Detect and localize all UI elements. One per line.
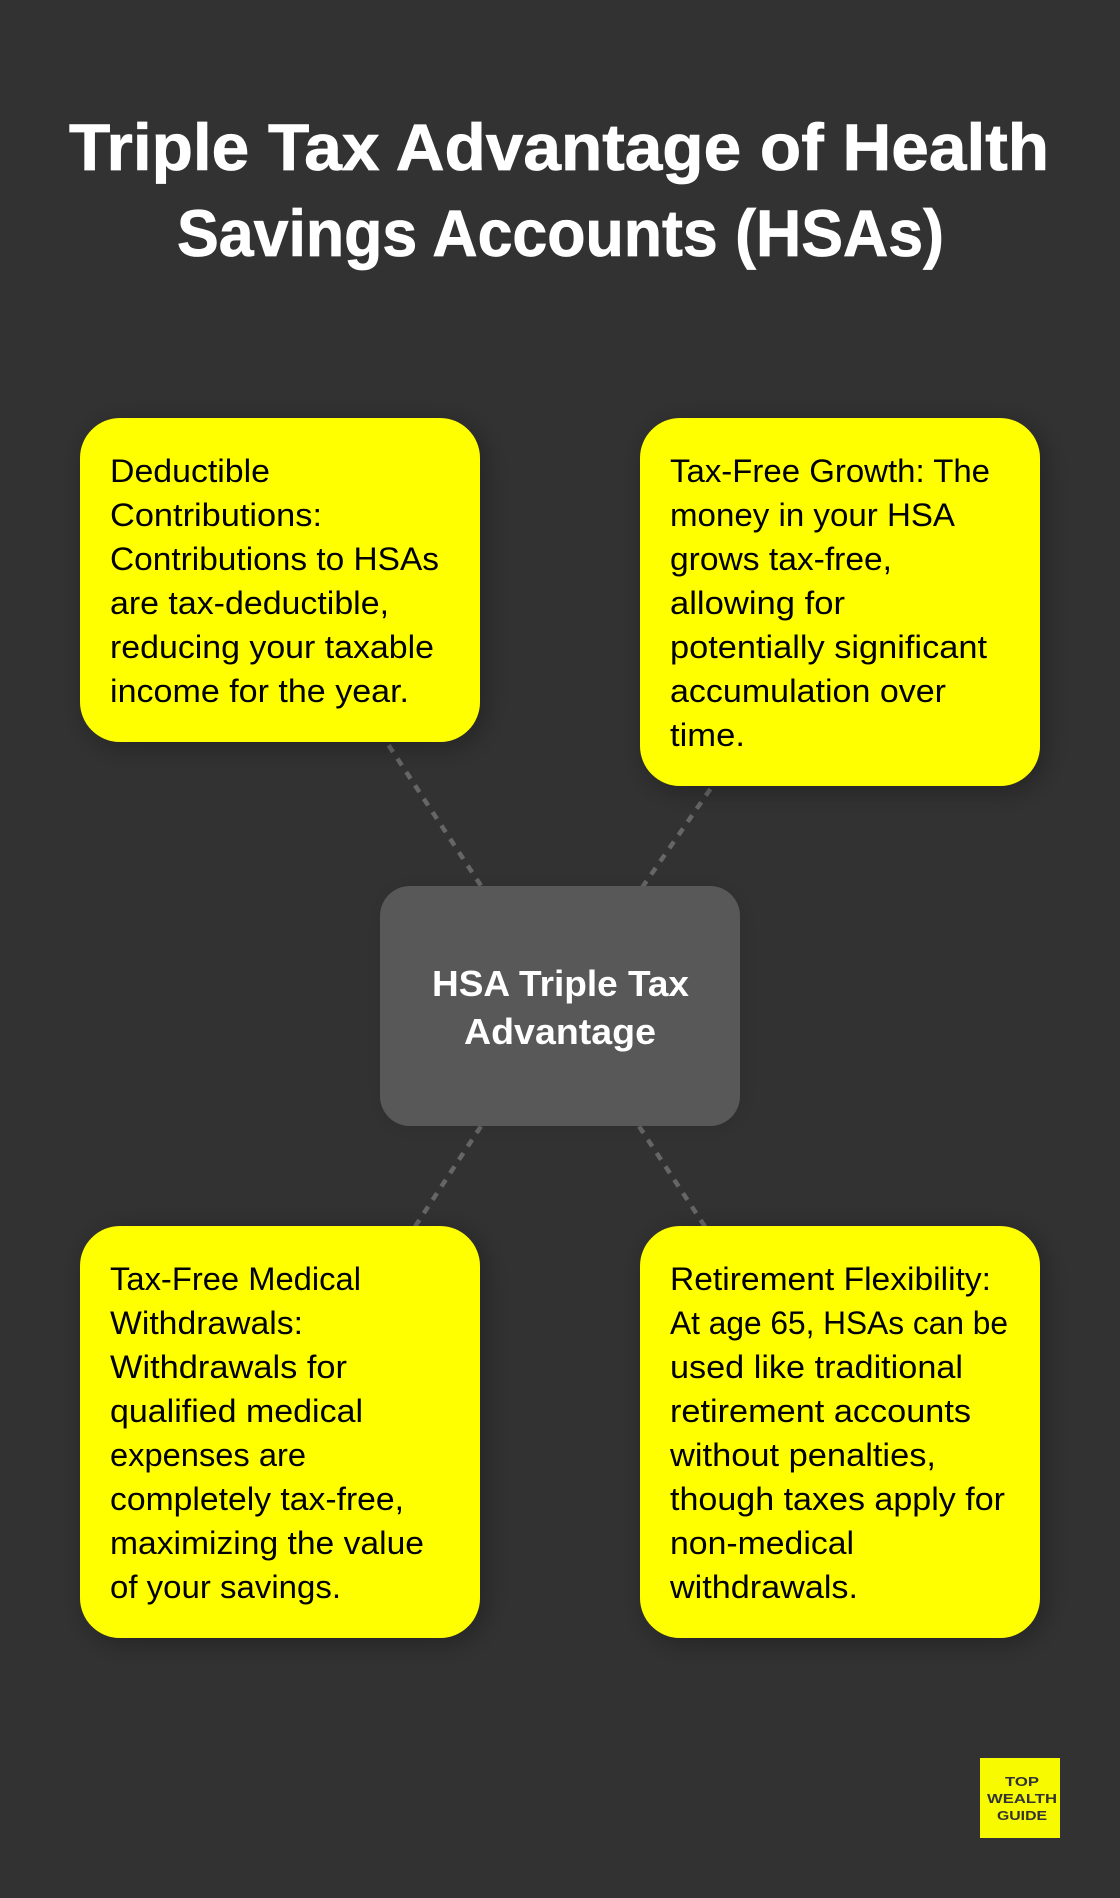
panel: tax-free growth (640, 418, 1040, 786)
center label (432, 963, 689, 1052)
dashed connector: tax-free growth to center (560, 602, 840, 1006)
card text: tax-free medical withdrawals: of your savings. (110, 1569, 341, 1605)
dashed connector: medical withdrawals to center (280, 1006, 560, 1432)
card text: tax-free medical withdrawals: maximizing the value (110, 1525, 424, 1561)
card text: retirement flexibility: withdrawals. (669, 1569, 858, 1605)
center label: Advantage (464, 1011, 656, 1052)
title: Triple Tax Advantage of Health (69, 110, 1049, 184)
card text: deductible contributions: Contributions to HSAs (110, 541, 439, 577)
card text: deductible contributions (110, 453, 439, 709)
logo: top wealth guide (980, 1758, 1060, 1838)
card text: retirement flexibility: used like traditional (670, 1349, 963, 1385)
card text: retirement flexibility: Retirement Flexibility: (670, 1261, 991, 1297)
card text: retirement flexibility: retirement accounts (670, 1393, 971, 1429)
card text: deductible contributions: reducing your taxable (110, 629, 434, 665)
card text: deductible contributions: Contributions: (110, 497, 322, 533)
card text: tax-free growth: time. (670, 717, 745, 753)
card text: deductible contributions: Deductible (110, 453, 270, 489)
card text: deductible contributions: income for the year. (110, 673, 409, 709)
center label: HSA Triple Tax (432, 963, 689, 1004)
card text: tax-free growth: allowing for (670, 585, 845, 621)
title: Savings Accounts (HSAs) (177, 196, 944, 270)
card text: tax-free growth: money in your HSA (670, 497, 956, 533)
card text: tax-free medical withdrawals: completely tax-free, (110, 1481, 404, 1517)
card text: tax-free medical withdrawals: Tax-Free Medical (110, 1261, 361, 1297)
logo text: GUIDE (997, 1809, 1047, 1823)
logo text: WEALTH (987, 1792, 1057, 1806)
card text: retirement flexibility: without penalties, (669, 1437, 936, 1473)
card text: retirement flexibility: though taxes apply for (670, 1481, 1005, 1517)
card text: tax-free medical withdrawals: Withdrawals for (110, 1349, 347, 1385)
card text: deductible contributions: are tax-deductible, (110, 585, 389, 621)
card text: tax-free growth: accumulation over (670, 673, 946, 709)
panel: deductible contributions (80, 418, 480, 742)
card text: tax-free growth: potentially significant (670, 629, 987, 665)
card text: tax-free growth (670, 453, 990, 753)
card text: retirement flexibility: At age 65, HSAs can be (670, 1305, 1008, 1341)
card text: tax-free medical withdrawals: qualified medical (110, 1393, 363, 1429)
panel: retirement flexibility (640, 1226, 1040, 1638)
logo text: TOP (1005, 1775, 1039, 1789)
card text: tax-free growth: Tax-Free Growth: The (670, 453, 990, 489)
card text: tax-free growth: grows tax-free, (670, 541, 892, 577)
panel: center node (380, 886, 740, 1126)
card text: tax-free medical withdrawals (110, 1261, 424, 1605)
logo text (987, 1775, 1057, 1823)
dashed connector: deductible contributions to center (280, 580, 560, 1006)
title (69, 110, 1049, 270)
card text: tax-free medical withdrawals: Withdrawals: (110, 1305, 303, 1341)
dashed connector: retirement flexibility to center (560, 1006, 840, 1432)
card text: retirement flexibility (669, 1261, 1008, 1605)
card text: retirement flexibility: non-medical (670, 1525, 854, 1561)
panel: tax-free medical withdrawals (80, 1226, 480, 1638)
card text: tax-free medical withdrawals: expenses are (110, 1437, 306, 1473)
